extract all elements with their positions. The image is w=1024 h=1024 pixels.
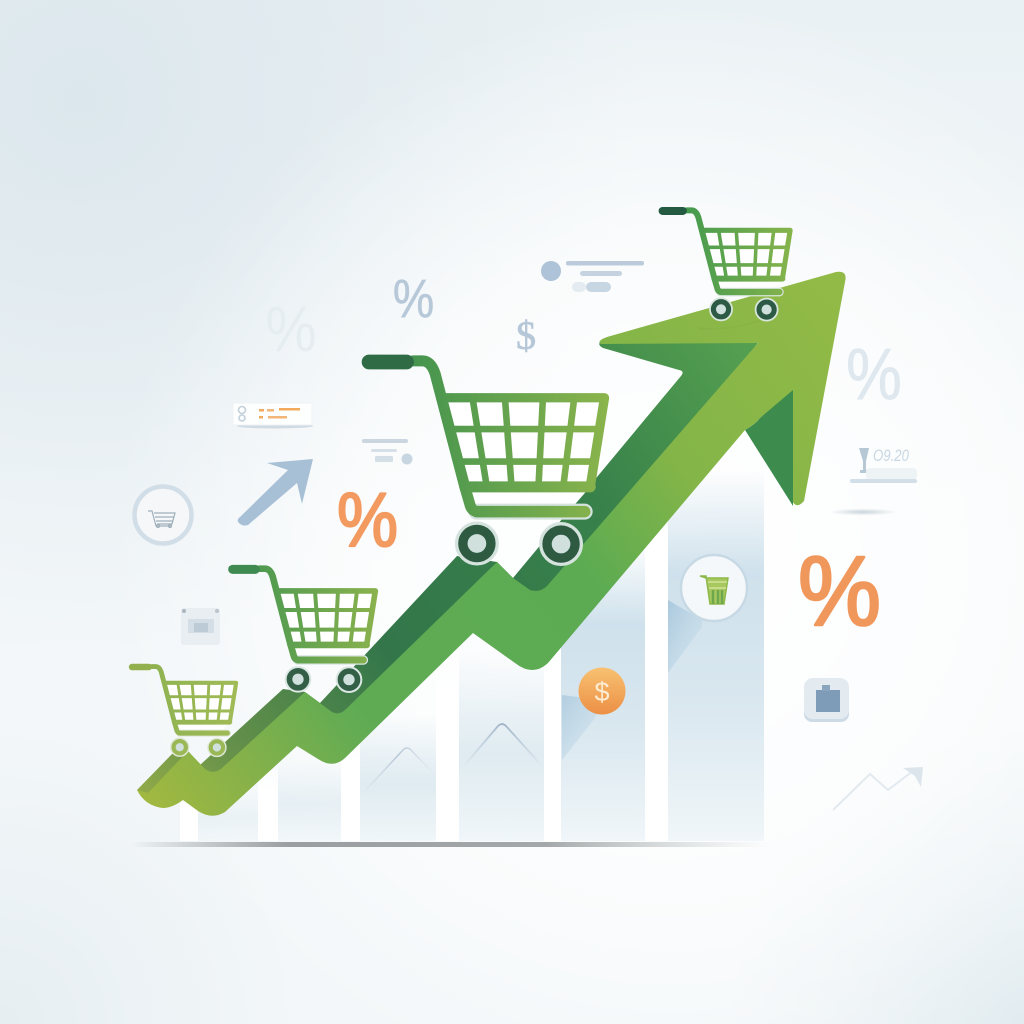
pale percent right: % [846, 335, 902, 415]
faint percent top-left: % [265, 293, 317, 365]
cart 4 [663, 210, 792, 321]
arrow dark fold [137, 340, 760, 797]
icon: mini green cart [700, 576, 728, 604]
wheel shadow on arrow head [695, 312, 780, 330]
dollar sign: $ [516, 313, 536, 358]
arrow body [137, 272, 846, 816]
speed lines icon top [541, 261, 644, 292]
blue up arrow [238, 459, 313, 526]
bar chart backdrop [180, 470, 764, 841]
bar chevron: fourth bar [463, 724, 543, 767]
small orange percent: % [337, 479, 398, 563]
large orange percent: % [798, 537, 881, 647]
building tile icon [804, 678, 849, 722]
ground shadow line [130, 842, 770, 847]
arrow inner barb [745, 390, 793, 506]
cart 2 [233, 569, 377, 692]
trophy and date icon [850, 446, 917, 483]
pin: dollar coin: $ [594, 677, 610, 707]
blue percent: % [393, 268, 434, 329]
speed lines icon left [362, 439, 412, 464]
pin: cart circle [668, 555, 747, 673]
small trend arrow [833, 767, 923, 810]
bar chevron: third bar [363, 748, 433, 793]
circle cart badge [134, 486, 192, 544]
cart 3 [369, 361, 607, 564]
main growth arrow [137, 272, 846, 816]
trophy and date icon: O9.20 [873, 446, 909, 465]
calendar note icon [181, 608, 220, 645]
small card with orange lines [233, 403, 313, 428]
cart 1 [132, 667, 237, 756]
soft shadow under arrow [829, 508, 897, 516]
icon: grey cart [148, 511, 175, 528]
pin: dollar coin [562, 668, 626, 760]
